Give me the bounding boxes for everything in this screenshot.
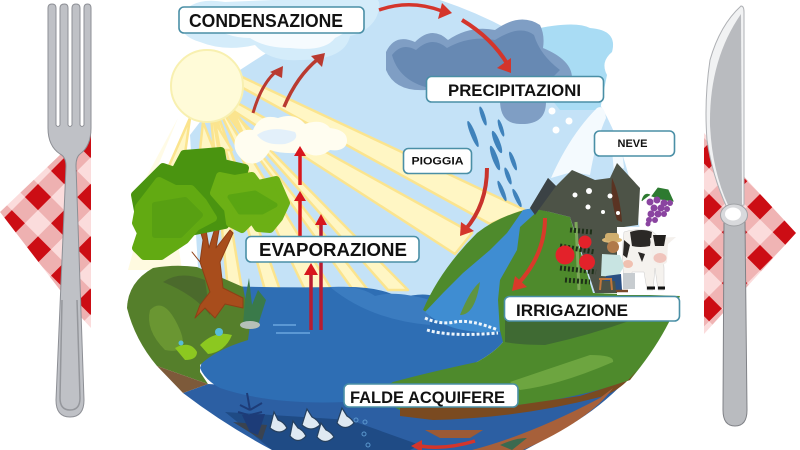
snowy peak (551, 107, 624, 178)
brown deposit (425, 430, 483, 438)
icon: knife (706, 6, 748, 426)
dark rain cloud (386, 20, 613, 124)
left land (127, 266, 250, 393)
arrow: irrigation flow (512, 218, 545, 291)
label: evaporazione (246, 236, 419, 262)
arrow: clouds to precipitation (462, 20, 511, 73)
rain drops (465, 106, 523, 208)
label: pioggia (404, 148, 472, 174)
label: falde acquifere: FALDE ACQUIFERE (350, 389, 505, 407)
arrow: groundwater flow (411, 440, 475, 450)
layer: rock wedge (233, 422, 267, 440)
icon: tomato plant (556, 222, 596, 290)
icon: fork (48, 4, 91, 417)
arrow: to condensation 1 (253, 66, 283, 113)
icon: sun (171, 50, 243, 122)
icon: mountains (530, 163, 640, 293)
foam (425, 318, 498, 334)
icon: grapes (642, 188, 673, 226)
label: neve: NEVE (618, 138, 648, 150)
layer: lower seabed (225, 412, 420, 450)
arrow: rain to land (460, 168, 487, 236)
label: precipitazioni: PRECIPITAZIONI (448, 81, 581, 100)
waterfall island (460, 282, 480, 315)
icon: tree (135, 151, 286, 318)
panel: right napkin (704, 133, 796, 334)
snow dots (548, 108, 572, 134)
label: irrigazione (504, 296, 680, 321)
small white cloud (234, 116, 347, 164)
deep ground layer (183, 322, 669, 450)
icon: reeds and plants (175, 278, 266, 360)
right land (370, 208, 680, 450)
green deposit (500, 438, 527, 450)
sun rays (128, 76, 525, 290)
arrows: evaporation (294, 146, 327, 330)
label: precipitazioni (426, 76, 604, 102)
lake highlight (330, 287, 430, 325)
panel: sky (190, 0, 640, 300)
panel: left napkin (0, 135, 91, 328)
lake water (200, 286, 510, 402)
condensation cloud (180, 0, 379, 60)
label: condensazione (179, 7, 364, 33)
label: irrigazione: IRRIGAZIONE (516, 301, 628, 320)
label: condensazione: CONDENSAZIONE (189, 11, 343, 31)
label: evaporazione: EVAPORAZIONE (259, 240, 407, 260)
arrow: condensation to clouds (379, 3, 452, 19)
label: falde acquifere (344, 384, 518, 407)
waterfall (425, 209, 540, 334)
icon: coral and fish (238, 393, 370, 447)
label: pioggia: PIOGGIA (412, 156, 464, 168)
arrow: to condensation 2 (284, 53, 325, 107)
lake ripples (273, 325, 310, 333)
label: neve (594, 131, 674, 156)
brown soil band (400, 362, 642, 420)
icon: farmer and cow (599, 227, 677, 295)
